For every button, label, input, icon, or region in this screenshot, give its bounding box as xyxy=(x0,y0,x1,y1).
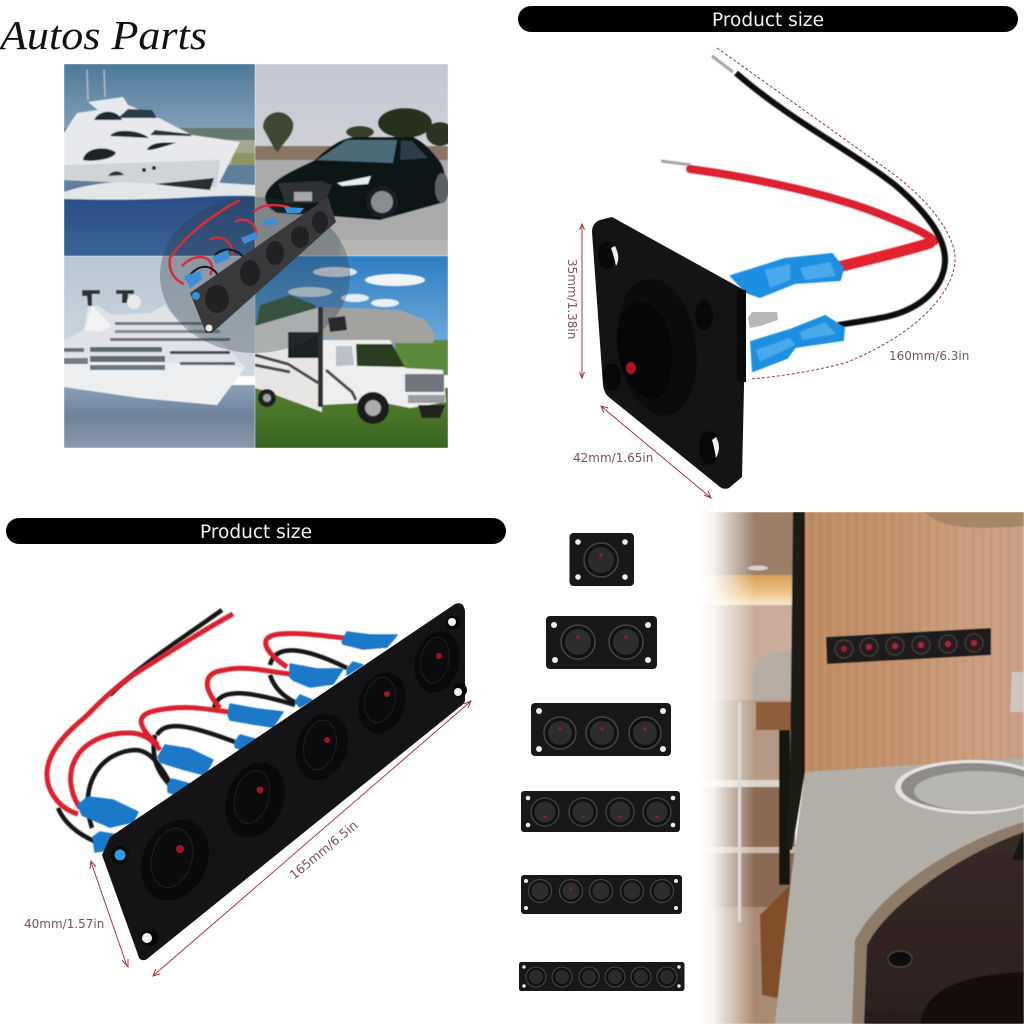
terminal: upper blue xyxy=(731,254,843,297)
dimension: height arrow xyxy=(580,224,584,378)
variant: 6 switches xyxy=(519,962,684,991)
panel: five-switch panel with dimensions xyxy=(24,603,471,976)
dark sink xyxy=(852,822,1024,1024)
heading bar: Product size (bottom left): Product size xyxy=(200,522,312,543)
photo: motorhome kitchen with installed panel xyxy=(700,512,1024,1024)
variant: 5 switches xyxy=(521,875,682,914)
panel: single switch with dimensions xyxy=(565,48,969,498)
switch plate xyxy=(102,603,467,960)
mounting holes xyxy=(111,616,467,946)
dimension: wire length dashed xyxy=(717,48,955,379)
photo: yacht xyxy=(64,64,255,256)
title: Autos Parts: Autos Parts xyxy=(0,12,207,58)
label: 35mm/1.38in: 35mm/1.38in xyxy=(565,259,579,339)
terminal: lower blue xyxy=(751,316,844,371)
tap xyxy=(1010,672,1024,712)
dimension: length arrow xyxy=(153,701,471,976)
rocker switch xyxy=(609,273,705,421)
photo: black sedan xyxy=(255,64,454,256)
black door post xyxy=(786,512,805,850)
label: 160mm/6.3in: 160mm/6.3in xyxy=(889,349,969,363)
photo: motorhome xyxy=(255,256,448,448)
terminals: blue xyxy=(78,632,397,852)
variant: 4 switches xyxy=(521,791,680,832)
round basin xyxy=(895,760,1024,814)
installed six-switch panel xyxy=(826,628,991,664)
switch plate xyxy=(592,217,746,489)
wires: red xyxy=(47,614,345,814)
counter top xyxy=(775,758,1024,1024)
interior background xyxy=(700,512,795,1024)
heading bar: Product size (bottom left) xyxy=(6,518,506,544)
wires: black xyxy=(58,610,347,842)
wire: red xyxy=(661,161,935,267)
overlay: translucent circle xyxy=(160,197,350,353)
variant: 3 switches xyxy=(531,703,671,756)
wood wall xyxy=(803,512,1024,782)
panel: switch variants, one to six gang xyxy=(519,533,684,991)
variant: 1 switch xyxy=(570,533,634,586)
label: 40mm/1.57in: 40mm/1.57in xyxy=(24,917,104,931)
terminal: metal spade xyxy=(748,312,778,328)
wire: black xyxy=(712,56,945,325)
cabinet above xyxy=(925,512,1024,528)
white fade on left edge xyxy=(700,512,755,1024)
overlay: five-switch panel xyxy=(170,197,336,333)
dimension: width arrow xyxy=(601,406,711,498)
photo: cruise ship xyxy=(64,256,255,448)
dimension: height arrow xyxy=(90,861,128,967)
heading bar: Product size (top right): Product size xyxy=(712,10,824,31)
variant: 2 switches xyxy=(546,616,657,669)
heading bar: Product size (top right) xyxy=(518,6,1018,32)
rocker switches xyxy=(128,626,466,912)
label: 42mm/1.65in: 42mm/1.65in xyxy=(573,451,653,465)
panel: vehicle collage xyxy=(64,64,454,448)
label: 165mm/6.5in: 165mm/6.5in xyxy=(286,817,360,882)
